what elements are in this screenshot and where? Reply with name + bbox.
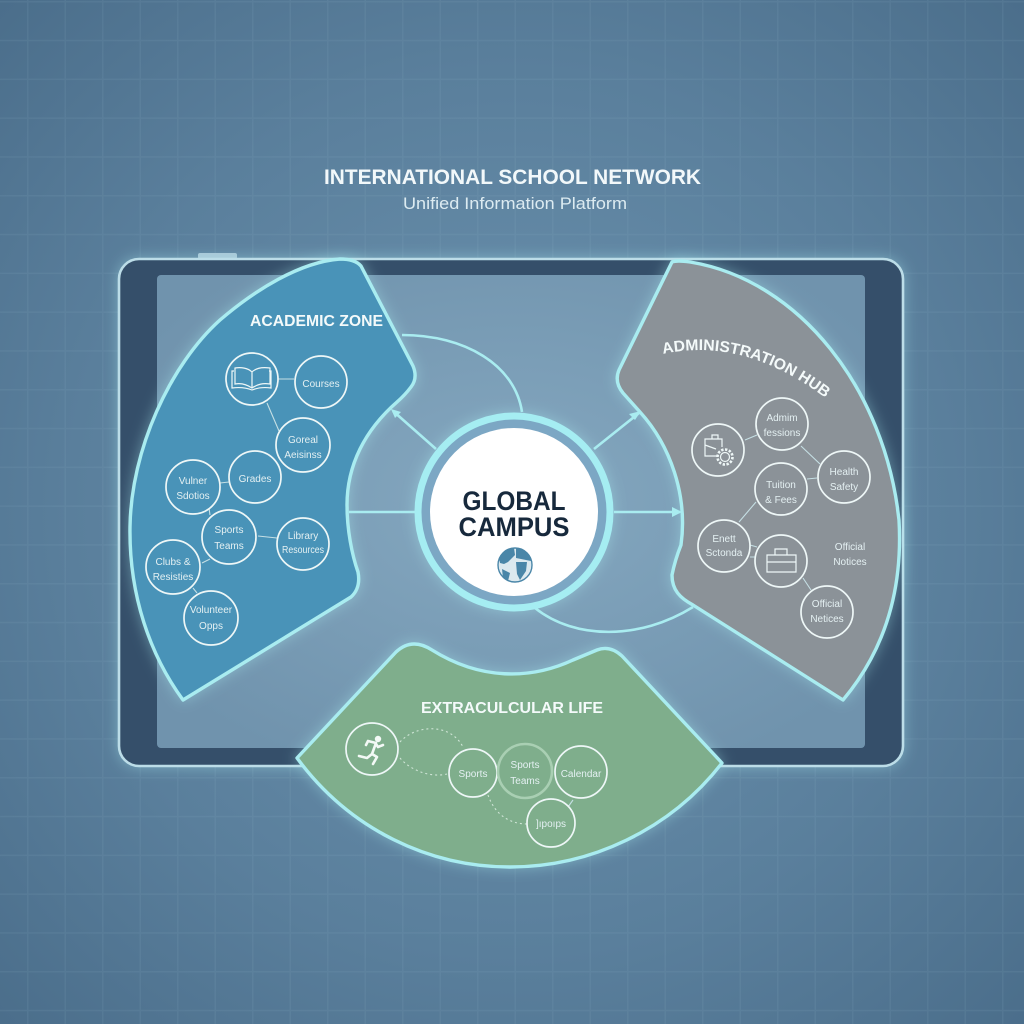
icon: briefcase with gear (692, 424, 744, 476)
node: official notices: Netices (810, 614, 844, 625)
panel: extracurricular life (297, 644, 722, 867)
icon: runner (346, 723, 398, 775)
label: official notices: Official (835, 542, 865, 553)
node: 1ipoips: ]ıpoıps (536, 819, 566, 830)
panel: administration hub (612, 255, 906, 704)
node: volunteer opps: Volunteer (190, 605, 233, 616)
icon: briefcase (755, 535, 807, 587)
node: library resources (277, 518, 329, 570)
node: volunteer opps (184, 591, 238, 645)
dashed connectors (400, 729, 527, 824)
heading: academic zone: ACADEMIC ZONE (250, 313, 383, 330)
node: clubs and resisties: Clubs & (155, 557, 191, 568)
central hub: global campus (418, 416, 610, 608)
node: event sctonda (698, 520, 750, 572)
node: grades (229, 451, 281, 503)
node: tuition and fees (755, 463, 807, 515)
node: library resources: Resources (282, 545, 324, 556)
node: goreal aeisinss: Goreal (288, 435, 318, 446)
title: INTERNATIONAL SCHOOL NETWORK (324, 166, 701, 189)
heading: administration hub: ADMINISTRATION HUB (663, 339, 830, 396)
node: courses (295, 356, 347, 408)
node: vulner sdotios (166, 460, 220, 514)
admin connectors (739, 435, 820, 590)
node: event sctonda: Sctonda (706, 548, 743, 559)
icon: globe (498, 548, 532, 582)
node: courses: Courses (302, 379, 340, 390)
node: sports teams (202, 510, 256, 564)
node: official notices: Official (812, 599, 842, 610)
node: sports (449, 749, 497, 797)
label: official notices: Notices (833, 557, 867, 568)
icon: open book (226, 353, 278, 405)
node: health safety: Safety (830, 482, 858, 493)
node: library resources: Library (288, 531, 318, 542)
central hub: global campus: GLOBAL (462, 486, 566, 516)
node: calendar: Calendar (561, 769, 602, 780)
node: sports teams: Sports (511, 760, 539, 771)
node: admin sessions: fessions (764, 428, 800, 439)
node: tuition and fees: Tuition (766, 480, 796, 491)
node: health safety (818, 451, 870, 503)
heading: extracurricular life: EXTRACULCULAR LIFE (421, 700, 603, 717)
node: goreal aeisinss (276, 418, 330, 472)
node: sports teams (498, 744, 552, 798)
node: tuition and fees: & Fees (765, 495, 797, 506)
node: volunteer opps: Opps (199, 621, 223, 632)
node: official notices (801, 586, 853, 638)
node: sports: Sports (459, 769, 487, 780)
node: health safety: Health (830, 467, 858, 478)
panel: academic zone (130, 259, 415, 700)
node: calendar (555, 746, 607, 798)
node: grades: Grades (239, 474, 271, 485)
node: event sctonda: Enett (712, 534, 736, 545)
tablet device frame (119, 253, 903, 766)
node: sports teams: Teams (214, 541, 244, 552)
label: official notices (833, 542, 867, 568)
node: vulner sdotios: Sdotios (176, 491, 210, 502)
node: goreal aeisinss: Aeisinss (284, 450, 322, 461)
node: 1ipoips (527, 799, 575, 847)
subtitle: Unified Information Platform (403, 194, 627, 213)
connector lines and arrows (349, 335, 693, 632)
central hub: global campus: CAMPUS (458, 512, 570, 542)
node: clubs and resisties: Resisties (153, 572, 193, 583)
node: sports teams: Teams (510, 776, 540, 787)
academic connectors (193, 379, 294, 593)
node: sports teams: Sports (215, 525, 243, 536)
node: admin sessions: Admim (766, 413, 798, 424)
node: vulner sdotios: Vulner (179, 476, 208, 487)
node: clubs and resisties (146, 540, 200, 594)
node: admin sessions (756, 398, 808, 450)
